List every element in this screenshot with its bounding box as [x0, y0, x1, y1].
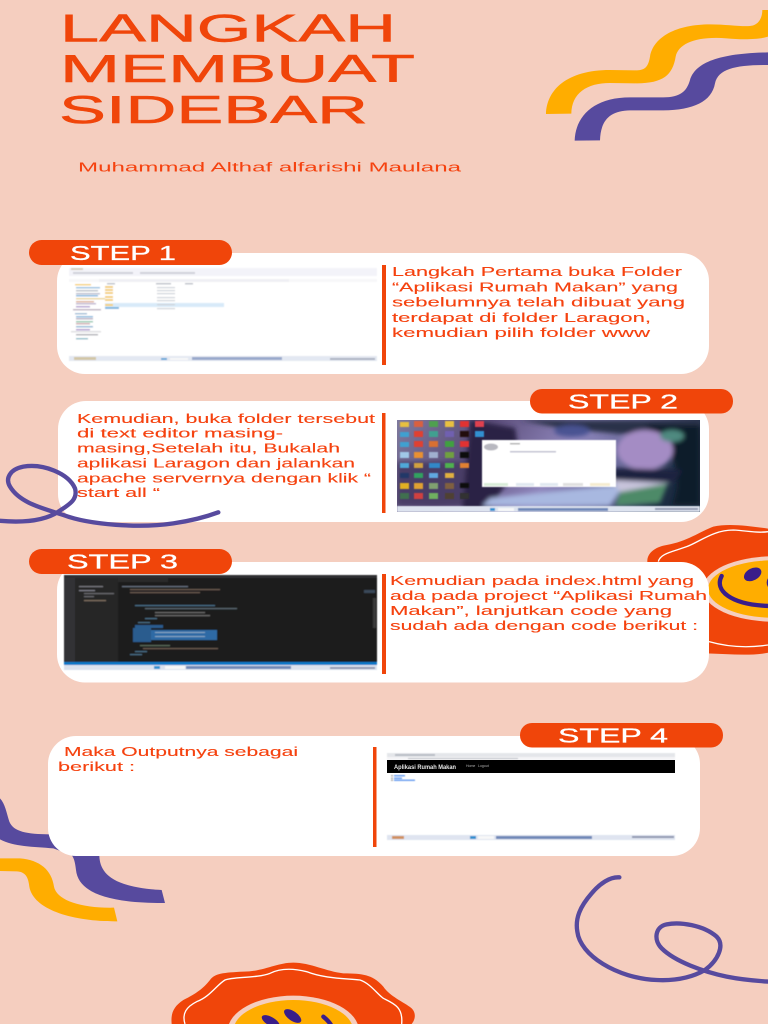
step 3 screenshot: code editor: [64, 575, 377, 670]
step 2 text: aplikasi Laragon dan jalankan: [77, 456, 355, 470]
step 4 screenshot: browser output: Logout: [478, 764, 489, 768]
panel: step 1: [29, 240, 709, 374]
step 4 pill: STEP 4: [558, 726, 668, 748]
panel: step 2: [58, 389, 733, 522]
decoration: left swirl: [0, 466, 218, 526]
author name: Muhammad Althaf alfarishi Maulana: [78, 160, 463, 174]
step 4 pill: [520, 723, 723, 748]
step 1 text: “Aplikasi Rumah Makan” yang: [392, 280, 678, 294]
step 3 text: Kemudian pada index.html yang: [390, 573, 694, 588]
title: [59, 8, 415, 132]
panel: step 4: [48, 723, 723, 856]
title: MEMBUAT: [60, 48, 415, 91]
step 3 text: ada pada project “Aplikasi Rumah: [390, 588, 707, 603]
decoration: right smiley flower: [647, 525, 768, 655]
step 4 screenshot: browser output: Home: [466, 764, 475, 768]
step 1 divider bar: [382, 265, 386, 365]
step 3 card: [57, 562, 709, 682]
step 1 card: [57, 253, 709, 374]
Laragon window: [482, 440, 616, 487]
title: SIDEBAR: [59, 89, 368, 132]
step 1 pill: [29, 240, 232, 265]
panel: step 3: [29, 549, 709, 682]
step 2 text: apache servernya dengan klik “: [77, 470, 371, 486]
step 2 divider bar: [382, 413, 386, 513]
step 2 text: start all “: [77, 485, 160, 500]
step 2 card: [58, 401, 709, 522]
step 3 text: [390, 573, 707, 633]
step 3 pill: STEP 3: [67, 552, 178, 574]
decoration: bottom left waves: [0, 798, 165, 921]
step 2 pill: [530, 389, 733, 414]
step 4 screenshot: browser output: [387, 753, 675, 840]
decoration: top right waves: [546, 10, 768, 141]
step 2 text: di text editor masing-: [77, 426, 283, 440]
step 3 divider bar: [382, 574, 386, 674]
step 3 text: Makan”, lanjutkan code yang: [390, 603, 672, 618]
step 4 screenshot: browser output: Aplikasi Rumah Makan: [394, 764, 456, 771]
step 4 text: [58, 744, 298, 774]
step 1 text: sebelumnya telah dibuat yang: [392, 294, 685, 310]
step 1 text: [392, 264, 685, 340]
step 2 screenshot: desktop with Laragon: [397, 420, 700, 512]
step 4 card: [48, 736, 700, 856]
step 1 pill: STEP 1: [70, 243, 176, 265]
step 4 divider bar: [373, 747, 376, 847]
step 1 text: Langkah Pertama buka Folder: [392, 264, 683, 279]
step 2 text: Kemudian, buka folder tersebut: [77, 411, 376, 426]
decoration: bottom right swirl: [577, 877, 768, 982]
step 3 pill: [29, 549, 232, 574]
decoration: bottom smiley flower: [171, 963, 415, 1024]
step 1 text: terdapat di folder Laragon,: [392, 310, 651, 325]
step 3 text: sudah ada dengan code berikut :: [390, 618, 698, 633]
step 1 text: kemudian pilih folder www: [392, 325, 651, 340]
step 1 screenshot: file explorer: [69, 267, 377, 361]
title: LANGKAH: [60, 8, 396, 50]
step 2 text: [77, 411, 376, 500]
step 4 text: berikut :: [58, 759, 135, 774]
step 2 text: masing,Setelah itu, Bukalah: [77, 440, 340, 456]
step 4 text: Maka Outputnya sebagai: [64, 744, 298, 759]
taskbar: [397, 506, 700, 512]
step 2 pill: STEP 2: [568, 392, 678, 414]
